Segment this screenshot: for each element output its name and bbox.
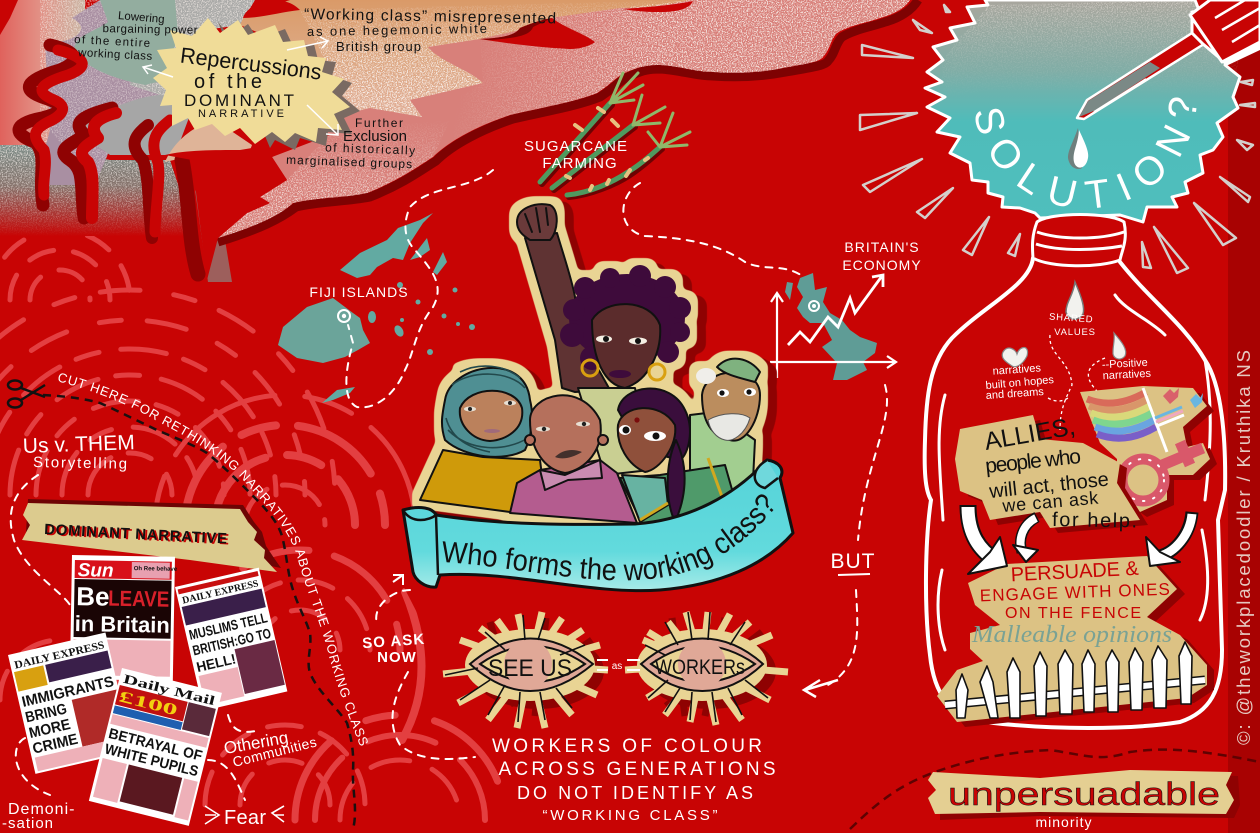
face <box>592 304 660 388</box>
dashed routes around newspapers <box>16 715 260 800</box>
label: fear <box>205 806 284 829</box>
label: narratives built on hopes and dreams: narratives <box>992 362 1042 378</box>
newspaper: Daily Mail: £100 <box>117 688 179 719</box>
hair <box>618 389 690 460</box>
dashed route: Fiji loop <box>346 170 493 407</box>
eyes <box>717 388 756 397</box>
newspaper: Daily Express muslims: DAILY EXPRESS <box>181 578 260 607</box>
newspaper: Daily Express immigrants: BRING <box>24 700 68 726</box>
bottle outline <box>925 258 1225 728</box>
text: workers of colour: “WORKING CLASS” <box>542 807 718 824</box>
map pin <box>809 301 819 311</box>
newspaper: Daily Express muslims: HELL! <box>195 650 237 675</box>
panel: persuade and fence <box>937 556 1214 727</box>
tape shadow <box>940 774 1240 820</box>
braid <box>668 440 685 522</box>
figure: bald man <box>510 395 637 523</box>
dark dashed boundary <box>850 750 1260 829</box>
newspaper: Daily Express muslims: MUSLIMS TELL <box>187 609 269 643</box>
cap <box>717 359 760 382</box>
allies text: people who <box>984 445 1082 478</box>
panel: bottle <box>925 214 1225 728</box>
allies text: we can ask <box>1001 488 1100 516</box>
label: positive narratives: narratives <box>1102 368 1152 382</box>
newspaper: Daily Express muslims <box>175 568 287 711</box>
tape text: DOMINANT NARRATIVE <box>44 521 227 548</box>
arrows from starburst <box>143 37 338 135</box>
label: demonisation <box>2 801 75 832</box>
patch shadow <box>945 561 1214 727</box>
allies text: for help. <box>1052 509 1137 532</box>
newspaper: Daily Express immigrants: MORE <box>27 716 72 742</box>
left smoke haze <box>0 0 85 150</box>
dark shadow under cloud <box>218 0 918 242</box>
text: further exclusion: Exclusion <box>343 128 407 145</box>
panel: allies <box>955 412 1148 533</box>
solution rays <box>860 5 1255 273</box>
starburst <box>153 18 350 144</box>
face <box>618 408 675 472</box>
icon: sugarcane <box>540 73 690 197</box>
text: us v them storytelling <box>22 431 135 473</box>
label: positive narratives: --Positive <box>1102 357 1148 371</box>
label: Britain's economy: ECONOMY <box>842 257 922 273</box>
starburst heading <box>179 42 323 120</box>
tape <box>928 770 1234 814</box>
patch shadow <box>963 420 1148 533</box>
black dashed cut line <box>43 395 355 829</box>
eye connector: as: as <box>612 661 622 672</box>
figure: old man with cap <box>690 359 760 510</box>
venus symbol <box>1122 442 1203 501</box>
text: lowering bargaining power: working class <box>77 47 153 63</box>
label: Britain's economy: BRITAIN'S <box>844 239 920 255</box>
text: workers of colour: DO NOT IDENTIFY AS <box>517 783 753 803</box>
raised arm <box>525 233 610 392</box>
arrow to banner <box>393 575 403 585</box>
red gaps in cloud <box>243 0 300 18</box>
label: so ask now <box>362 631 426 666</box>
text: lowering bargaining power: bargaining power <box>102 23 198 37</box>
moustache <box>555 450 582 458</box>
text: lowering bargaining power: Lowering <box>117 10 165 26</box>
fence rail <box>945 680 1205 705</box>
persuade text: ON THE FENCE <box>1005 605 1141 622</box>
eye bodies <box>465 629 595 701</box>
panel: smoke clouds <box>0 0 918 282</box>
text: workers of colour: WORKERS OF COLOUR <box>492 736 762 757</box>
text: working class misrepresented: as one hegemonic white <box>307 21 487 39</box>
starburst heading: DOMINANT <box>184 91 294 110</box>
text: us v them storytelling: Us v. THEM <box>22 431 135 458</box>
starburst heading: of the <box>194 71 262 93</box>
panel: unpersuadable <box>928 770 1240 820</box>
grey smoke <box>75 95 190 155</box>
text: working class misrepresented: British group <box>336 39 421 54</box>
credit text: ©: @theworkplacedoodler / Kruthika NS <box>1233 350 1254 745</box>
newspaper: Daily Express immigrants: IMMIGRANTS <box>20 673 116 711</box>
white hair <box>696 368 716 384</box>
patch shadow <box>1087 391 1217 517</box>
banner text: Who forms the working class? <box>442 494 774 580</box>
text: further exclusion: of historically <box>325 140 415 158</box>
green-grey smoke <box>75 0 178 85</box>
figure: woman in sari <box>618 389 735 530</box>
newspaper: The Sun: LEAVE <box>108 586 169 612</box>
label: othering communities: Communities <box>231 734 318 770</box>
dark red smoke stacks <box>19 45 198 274</box>
newspaper: Daily Mail: Daily Mail <box>122 671 217 708</box>
fence pickets <box>956 642 1192 718</box>
kurta <box>690 412 755 510</box>
newspaper: The Sun: Be <box>76 581 110 612</box>
text: further exclusion <box>286 116 415 171</box>
head <box>530 395 601 473</box>
yellow tunic <box>420 450 545 512</box>
hearts <box>1163 388 1179 404</box>
right eye: WORKERs <box>655 656 745 679</box>
eyes <box>619 417 666 441</box>
figure: woman in hijab <box>420 366 545 512</box>
panel: Fiji islands <box>278 170 493 407</box>
right eye <box>641 612 768 722</box>
label: but: BUT <box>830 550 876 573</box>
icon: arrows from allies to persuade <box>968 505 1192 574</box>
dashed route: Britain to but <box>858 385 887 540</box>
label: positive narratives <box>1102 357 1152 382</box>
map: northern island <box>340 213 433 278</box>
lavender smoke <box>35 0 185 185</box>
map pin <box>338 310 350 322</box>
arrow to eyes <box>804 680 838 697</box>
pink shirt <box>510 460 637 523</box>
panel: repercussions starburst <box>153 18 360 150</box>
dashed route: so ask to workers text <box>392 672 475 759</box>
label: shared values: VALUES <box>1054 327 1096 338</box>
label: sugarcane farming: FARMING <box>542 155 618 172</box>
solution text: SOLUTION? <box>976 98 1196 208</box>
blouse <box>622 475 668 522</box>
afro hair <box>560 265 691 370</box>
text: working class misrepresented <box>304 6 556 54</box>
dashed route: but to eyes <box>828 590 857 685</box>
background fingerprint swirls <box>0 230 505 820</box>
grey speckled ground <box>0 145 195 236</box>
icon: positive narratives drop <box>1113 333 1126 359</box>
panel: newspaper collage <box>8 555 287 826</box>
patch backing <box>955 415 1140 528</box>
unpersuadable text: unpersuadable <box>948 776 1220 812</box>
text: us v them storytelling: Storytelling <box>33 454 127 473</box>
label: Fiji Islands: FIJI ISLANDS <box>309 284 409 300</box>
sari <box>620 465 735 530</box>
eyes <box>596 336 647 344</box>
persuade text: PERSUADE & <box>1010 558 1140 586</box>
map: Britain <box>797 273 877 380</box>
eyes <box>464 400 516 412</box>
persuade text: ENGAGE WITH ONES <box>980 580 1170 605</box>
label: narratives built on hopes and dreams <box>985 362 1055 402</box>
starburst heading: NARRATIVE <box>198 108 284 120</box>
newspaper: The Sun: in Britain <box>75 611 170 638</box>
rainbow flag <box>1087 392 1156 438</box>
newspaper: Daily Express muslims: BRITISH:GO TO <box>191 625 273 658</box>
label: so ask now: NOW <box>377 649 417 666</box>
allies text: will act, those <box>987 469 1110 503</box>
newspaper: Daily Mail: BETRAYAL OF <box>107 726 204 765</box>
credit strip <box>1228 0 1260 833</box>
panel: see us as workers eyes <box>443 612 788 728</box>
panel: flag patch <box>1080 386 1217 517</box>
eye shadows <box>472 633 776 709</box>
icon: shared values drop <box>1066 282 1084 319</box>
peach patch under starburst <box>165 120 252 162</box>
icon: scissors <box>8 380 45 408</box>
eyes <box>536 422 590 432</box>
eye lashes: left <box>443 612 608 728</box>
text: lowering bargaining power: of the entire <box>74 34 150 50</box>
panel: cut here line <box>6 373 368 826</box>
dashed route: so ask to banner <box>376 590 410 625</box>
allies text: ALLIES, <box>982 412 1077 456</box>
eye connector: as <box>597 660 640 672</box>
banner: who forms the working class <box>402 458 794 592</box>
dashed route: storytelling to sun <box>11 475 70 605</box>
mouth <box>609 370 631 378</box>
pink smoke <box>218 0 910 238</box>
eye lashes: right <box>625 612 788 725</box>
label: narratives built on hopes and dreams: built on hopes <box>985 374 1055 392</box>
newspaper: Daily Express immigrants: DAILY EXPRESS <box>13 639 106 672</box>
chart trend line <box>788 275 883 345</box>
ribbon fold <box>403 510 438 575</box>
bottle neck <box>1032 214 1125 266</box>
left eye <box>445 615 593 722</box>
newspaper: Daily Mail: WHITE PUPILS <box>103 741 200 780</box>
persuade text <box>980 558 1170 622</box>
banner ribbon <box>403 460 793 591</box>
text: further exclusion: marginalised groups <box>286 153 412 171</box>
label: so ask now: SO ASK <box>362 631 426 652</box>
map: smaller islands <box>322 238 475 403</box>
label: fear: Fear <box>224 807 266 829</box>
starburst heading: Repercussions <box>179 42 323 85</box>
tape <box>22 503 277 572</box>
label: sugarcane farming: SUGARCANE <box>524 138 628 155</box>
label: shared values <box>1049 311 1096 338</box>
label: minority: minority <box>1035 814 1093 830</box>
starburst shadow <box>218 22 360 150</box>
panel: dominant narrative tape <box>22 499 281 572</box>
starburst <box>925 0 1240 222</box>
figure: woman with raised fist <box>517 204 691 475</box>
map: main island <box>278 298 370 363</box>
patch backing <box>1080 386 1210 512</box>
dashed route: sugarcane to Britain <box>623 183 805 278</box>
icon: drop <box>1068 128 1088 169</box>
patch backing <box>937 556 1207 722</box>
allies text <box>982 412 1137 532</box>
peach smoke <box>240 0 700 130</box>
cut here text: CUT HERE FOR RETHINKING NARRATIVES ABOUT THE WORKING CLASS <box>58 373 368 746</box>
newspaper: Daily Mail <box>89 668 222 826</box>
earrings <box>582 360 665 380</box>
ribbon curl <box>755 460 778 488</box>
newspaper: The Sun: Sun <box>78 560 114 582</box>
red wedge below starburst <box>165 135 330 280</box>
malleable opinions: Malleable opinions <box>971 622 1172 648</box>
fist <box>517 204 557 240</box>
label: shared values: SHARED <box>1049 311 1094 326</box>
route lines <box>376 183 887 759</box>
label: demonisation: -sation <box>2 815 54 832</box>
trans flag <box>1155 407 1184 426</box>
label: narratives built on hopes and dreams: and dreams <box>985 386 1045 402</box>
text: further exclusion: Further <box>355 116 403 130</box>
text: workers of colour: ACROSS GENERATIONS <box>498 759 776 780</box>
label: Britain's economy <box>842 239 922 273</box>
tape text: DOMINANT NARRATIVE <box>46 522 229 549</box>
head <box>702 372 760 441</box>
panel: solution starburst <box>924 0 1260 224</box>
label: demonisation: Demoni- <box>8 801 75 818</box>
label: othering communities: Othering <box>222 728 290 758</box>
dashed connectors <box>1048 335 1105 430</box>
text: workers of colour <box>492 736 776 824</box>
left eye: SEE US <box>488 655 572 682</box>
tape shadow <box>26 499 281 568</box>
chart axes <box>770 293 896 378</box>
text: working class misrepresented: “Working class” misrepresented <box>304 6 556 27</box>
panel: Britain's economy chart <box>770 239 922 380</box>
newspaper: The Sun: Oh Ree behave <box>134 566 178 573</box>
newspaper: Daily Express immigrants: CRIME <box>31 731 80 758</box>
panel: characters <box>420 204 760 530</box>
icon: heart <box>1002 347 1028 367</box>
icon: dropper <box>1077 0 1260 119</box>
torso <box>578 388 650 475</box>
label: sugarcane farming <box>524 138 628 172</box>
bottle highlights <box>938 295 1210 650</box>
lips <box>484 429 500 433</box>
newspaper: Daily Express immigrants <box>8 633 133 774</box>
face <box>460 391 522 441</box>
hijab <box>442 368 532 457</box>
beard <box>708 414 750 440</box>
text: lowering bargaining power <box>74 10 198 63</box>
flag pole <box>1143 388 1167 452</box>
newspaper: The Sun <box>70 555 178 681</box>
